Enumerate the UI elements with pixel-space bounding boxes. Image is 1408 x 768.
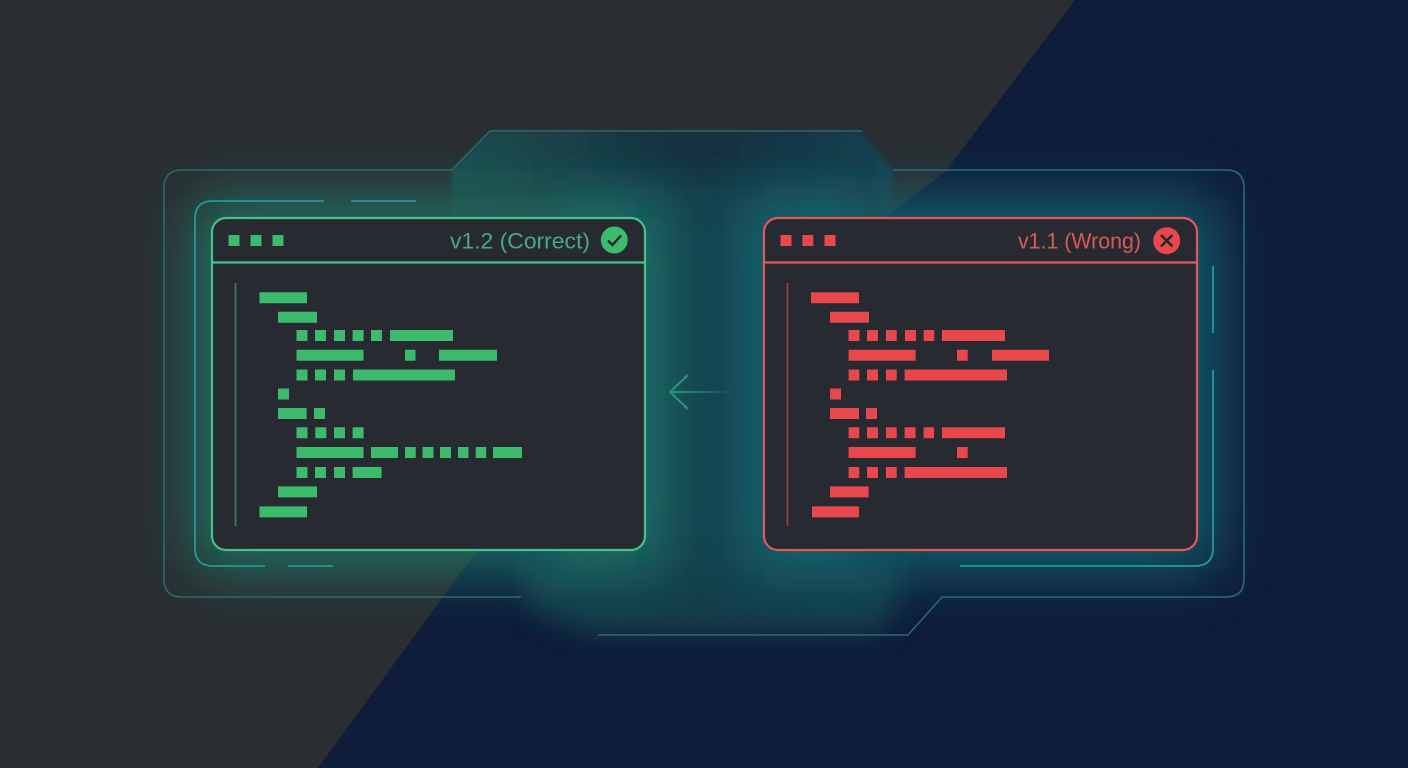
window dots — [780, 235, 836, 246]
code gutter line — [786, 283, 788, 526]
arrow pointing from wrong version to correct version — [670, 375, 736, 409]
background: charcoal diagonal panel — [0, 0, 1075, 768]
panel: correct version window — [212, 218, 645, 550]
teal glow behind the windows — [192, 131, 1217, 634]
window body — [764, 218, 1197, 550]
header divider — [212, 261, 645, 264]
outer circuit frame — [164, 131, 1244, 635]
window body — [212, 218, 645, 550]
icon: cross mark — [1153, 227, 1180, 254]
inner frame accents — [195, 201, 1213, 566]
code lines — [260, 292, 522, 517]
window dots — [228, 235, 284, 246]
icon: check mark — [601, 226, 628, 254]
panel: wrong version window — [764, 218, 1197, 550]
code gutter line — [234, 283, 236, 526]
code lines — [811, 292, 1049, 517]
header divider — [764, 261, 1197, 264]
version label: v1.1 (Wrong) — [1018, 228, 1141, 254]
version label: v1.2 (Correct) — [450, 228, 590, 254]
